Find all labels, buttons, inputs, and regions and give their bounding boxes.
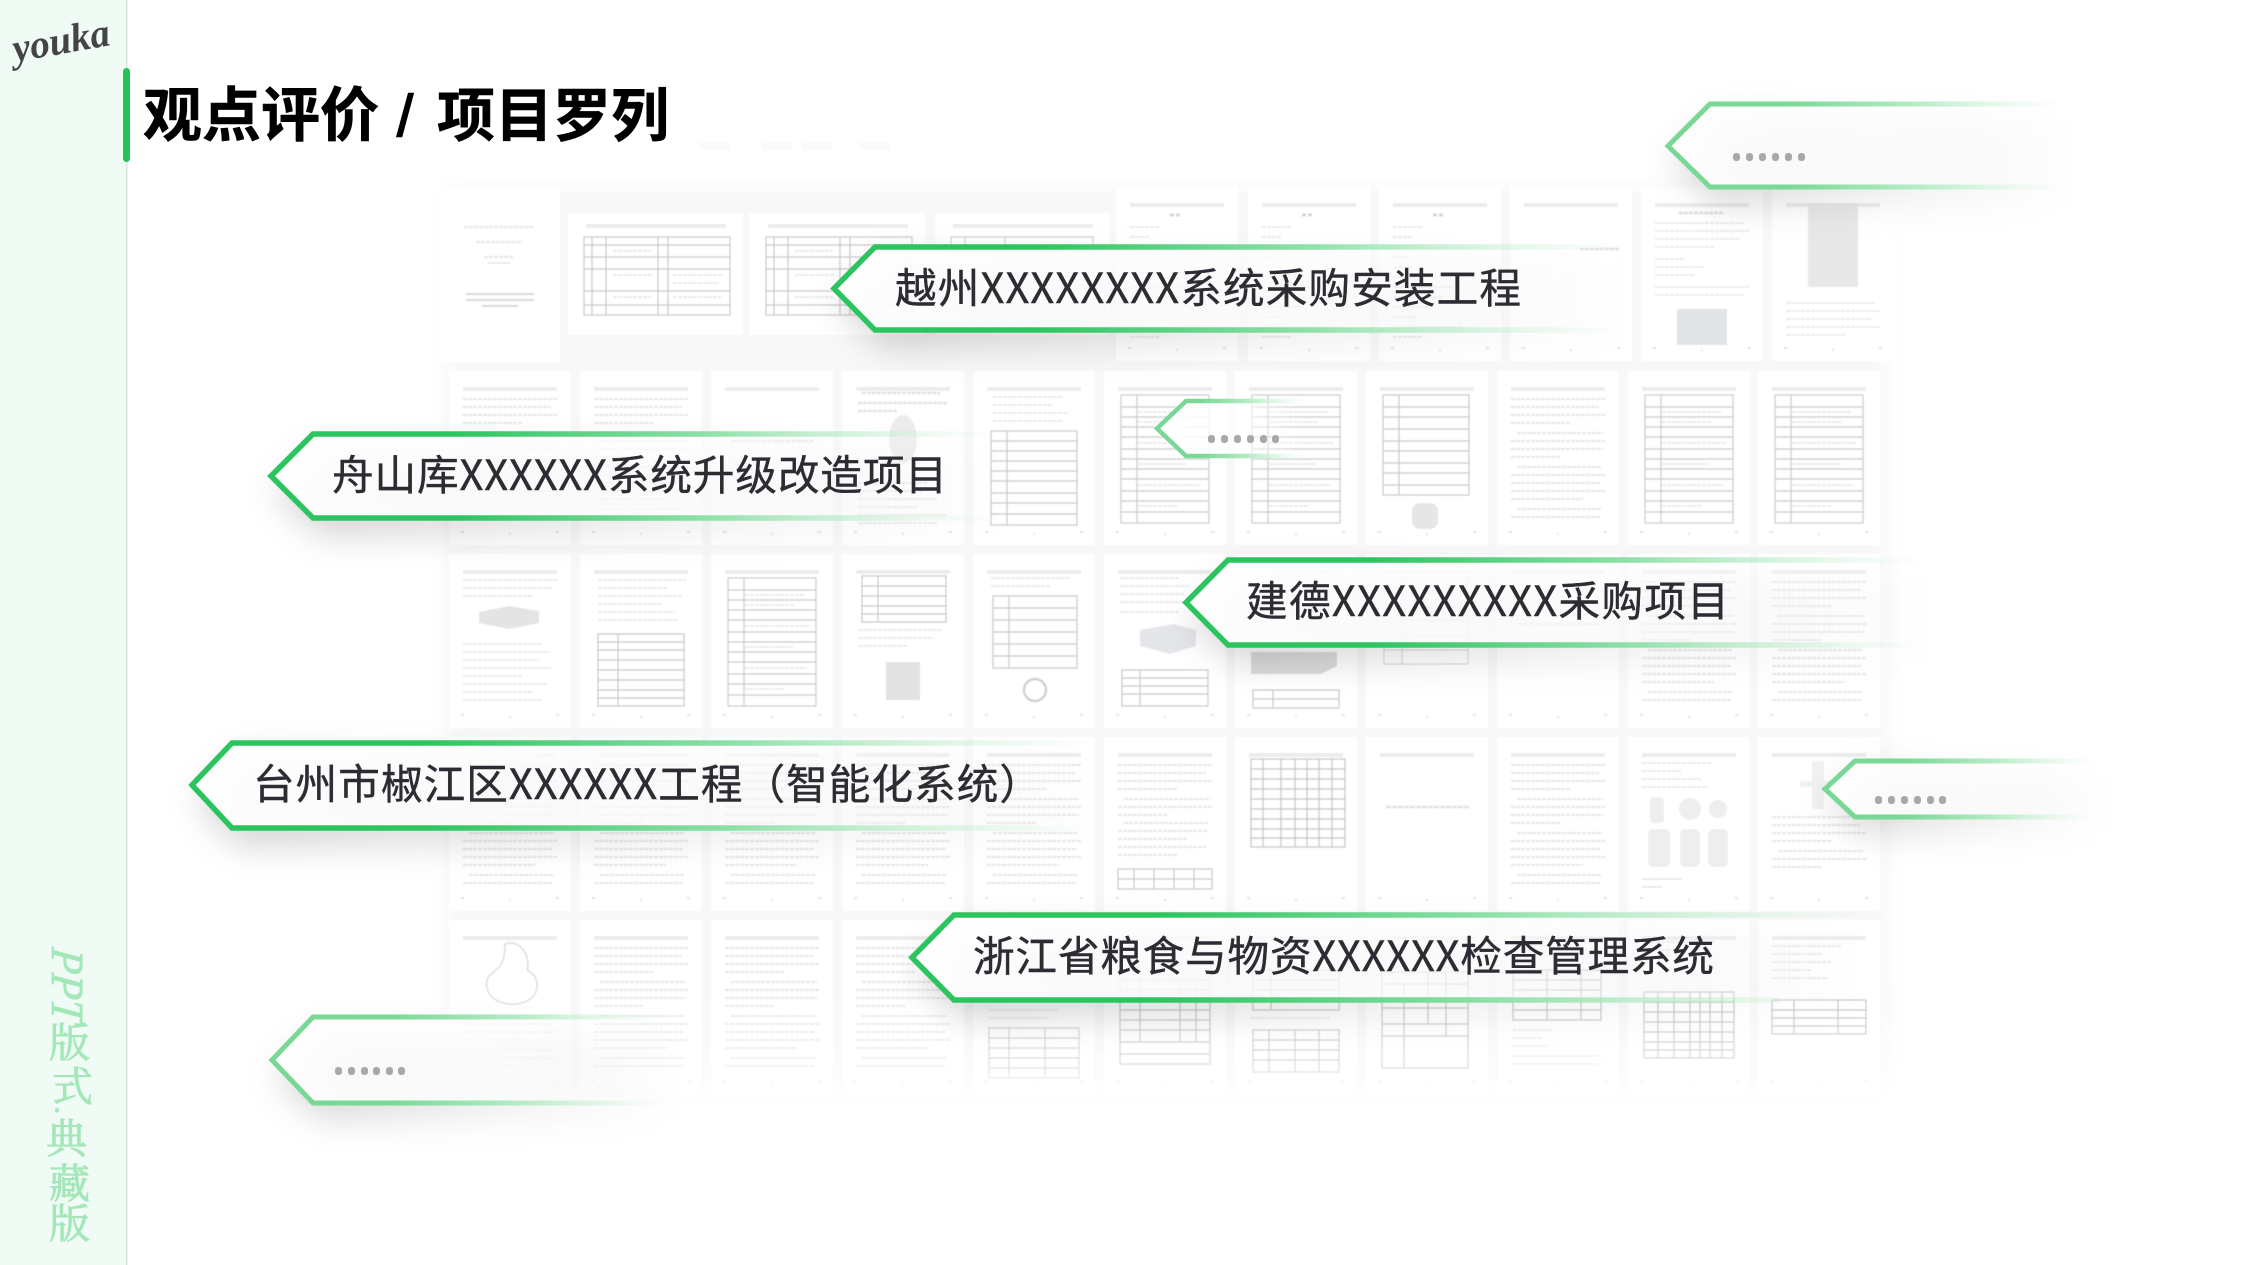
tag: 建德 project	[1183, 558, 1933, 663]
row 2 of pages	[449, 371, 1880, 545]
title: 观点评价	[143, 83, 379, 149]
row 3 of pages	[449, 554, 1880, 728]
tag: 台州 project	[189, 741, 1108, 846]
tag: 浙江省 project	[909, 913, 1877, 1018]
title: /	[397, 84, 414, 149]
tag: bottom-left placeholder	[269, 1017, 678, 1119]
background: document page collage	[430, 142, 1910, 1120]
label: 舟山库XXXXXX系统升级改造项目	[332, 442, 947, 502]
label: 台州市椒江区XXXXXX工程（智能化系统）	[253, 751, 1041, 811]
label: 建德XXXXXXXXX采购项目	[1246, 568, 1729, 628]
label: 越州XXXXXXXX系统采购安装工程	[895, 255, 1521, 315]
dots	[1733, 153, 1805, 161]
dots	[1208, 435, 1279, 443]
vertical caption: PPT版式·典藏版	[42, 945, 93, 1247]
title	[143, 83, 669, 149]
tag: right placeholder	[1822, 759, 2103, 833]
title accent bar	[123, 68, 130, 162]
label: 浙江省粮食与物资XXXXXX检查管理系统	[973, 923, 1714, 983]
vertical caption: PPT版式·典藏版: ·	[52, 1094, 62, 1127]
tag: top-right placeholder	[1666, 102, 2073, 205]
vertical caption: PPT版式·典藏版: 典	[46, 1116, 89, 1162]
row 4 of pages	[449, 737, 1880, 911]
row 1 of pages	[438, 187, 1894, 362]
vertical caption: PPT版式·典藏版: 版	[49, 1201, 90, 1247]
left sidebar	[0, 0, 128, 1265]
dots	[335, 1067, 405, 1075]
vertical caption: PPT版式·典藏版: 式	[52, 1064, 93, 1110]
vertical caption: PPT版式·典藏版: PPT	[42, 945, 93, 1028]
title: 项目罗列	[437, 84, 669, 149]
tag: 越州 project	[831, 245, 1634, 348]
tag: centre placeholder	[1154, 399, 1304, 458]
row 5 of pages	[449, 920, 1880, 1094]
vertical caption: PPT版式·典藏版: 版	[49, 1020, 90, 1066]
logo: youka: youka	[5, 10, 113, 72]
vertical caption: PPT版式·典藏版: 藏	[49, 1161, 90, 1207]
dots	[1875, 796, 1946, 804]
tag: 舟山库 project	[268, 432, 1008, 536]
